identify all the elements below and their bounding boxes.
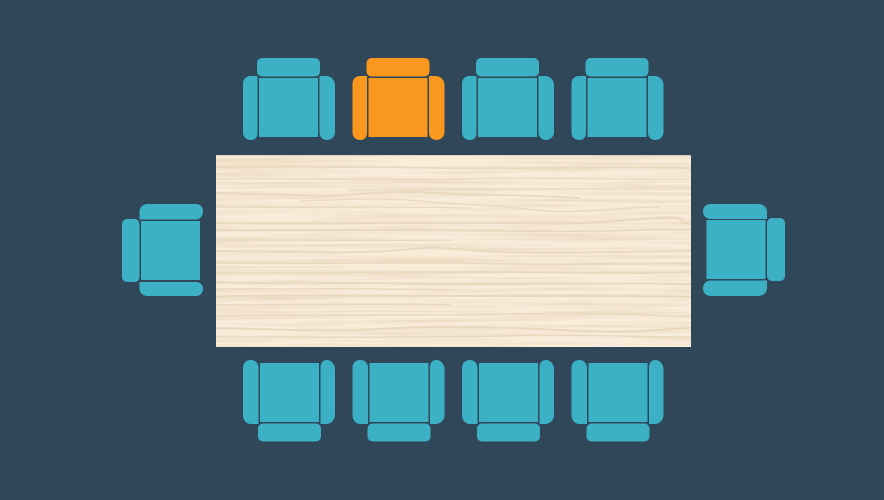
bottom arm — [140, 282, 203, 296]
left arm — [572, 76, 586, 140]
seat — [259, 78, 318, 137]
top chair 2, highlighted orange — [352, 58, 444, 140]
left arm — [243, 360, 258, 424]
seat — [478, 78, 537, 137]
left chair — [122, 204, 203, 296]
right arm — [538, 76, 554, 140]
back — [586, 424, 650, 442]
left arm — [462, 76, 476, 140]
seat — [588, 78, 646, 137]
seat — [370, 363, 428, 422]
right arm — [429, 76, 444, 140]
seat — [588, 363, 648, 422]
back — [122, 219, 140, 282]
right arm — [648, 76, 664, 140]
seat — [141, 221, 200, 280]
top chair 1 — [243, 58, 335, 140]
back — [586, 58, 648, 76]
bottom arm — [703, 280, 767, 296]
right arm — [540, 360, 554, 424]
left arm — [243, 76, 258, 140]
right arm — [320, 360, 335, 424]
seat — [260, 363, 319, 422]
seat — [479, 363, 538, 422]
left arm — [462, 360, 478, 424]
left arm — [352, 76, 367, 140]
top chair 3 — [462, 58, 554, 140]
left arm — [572, 360, 587, 424]
right arm — [649, 360, 664, 424]
back — [368, 424, 430, 442]
back — [258, 424, 321, 442]
bottom chair 4 — [572, 360, 664, 442]
back — [767, 218, 785, 281]
seat — [368, 78, 428, 137]
back — [477, 424, 540, 442]
table — [216, 155, 691, 347]
left arm — [352, 360, 368, 424]
top arm — [140, 204, 203, 220]
back — [476, 58, 539, 76]
top arm — [703, 204, 767, 219]
meeting room diagram — [122, 58, 785, 442]
bottom chair 3 — [462, 360, 554, 442]
right chair — [703, 204, 785, 296]
bottom chair 1 — [243, 360, 335, 442]
back — [366, 58, 430, 76]
right arm — [430, 360, 444, 424]
bottom chair 2 — [352, 360, 444, 442]
top chair 4 — [572, 58, 664, 140]
seat — [706, 220, 766, 279]
back — [257, 58, 320, 76]
right arm — [320, 76, 335, 140]
